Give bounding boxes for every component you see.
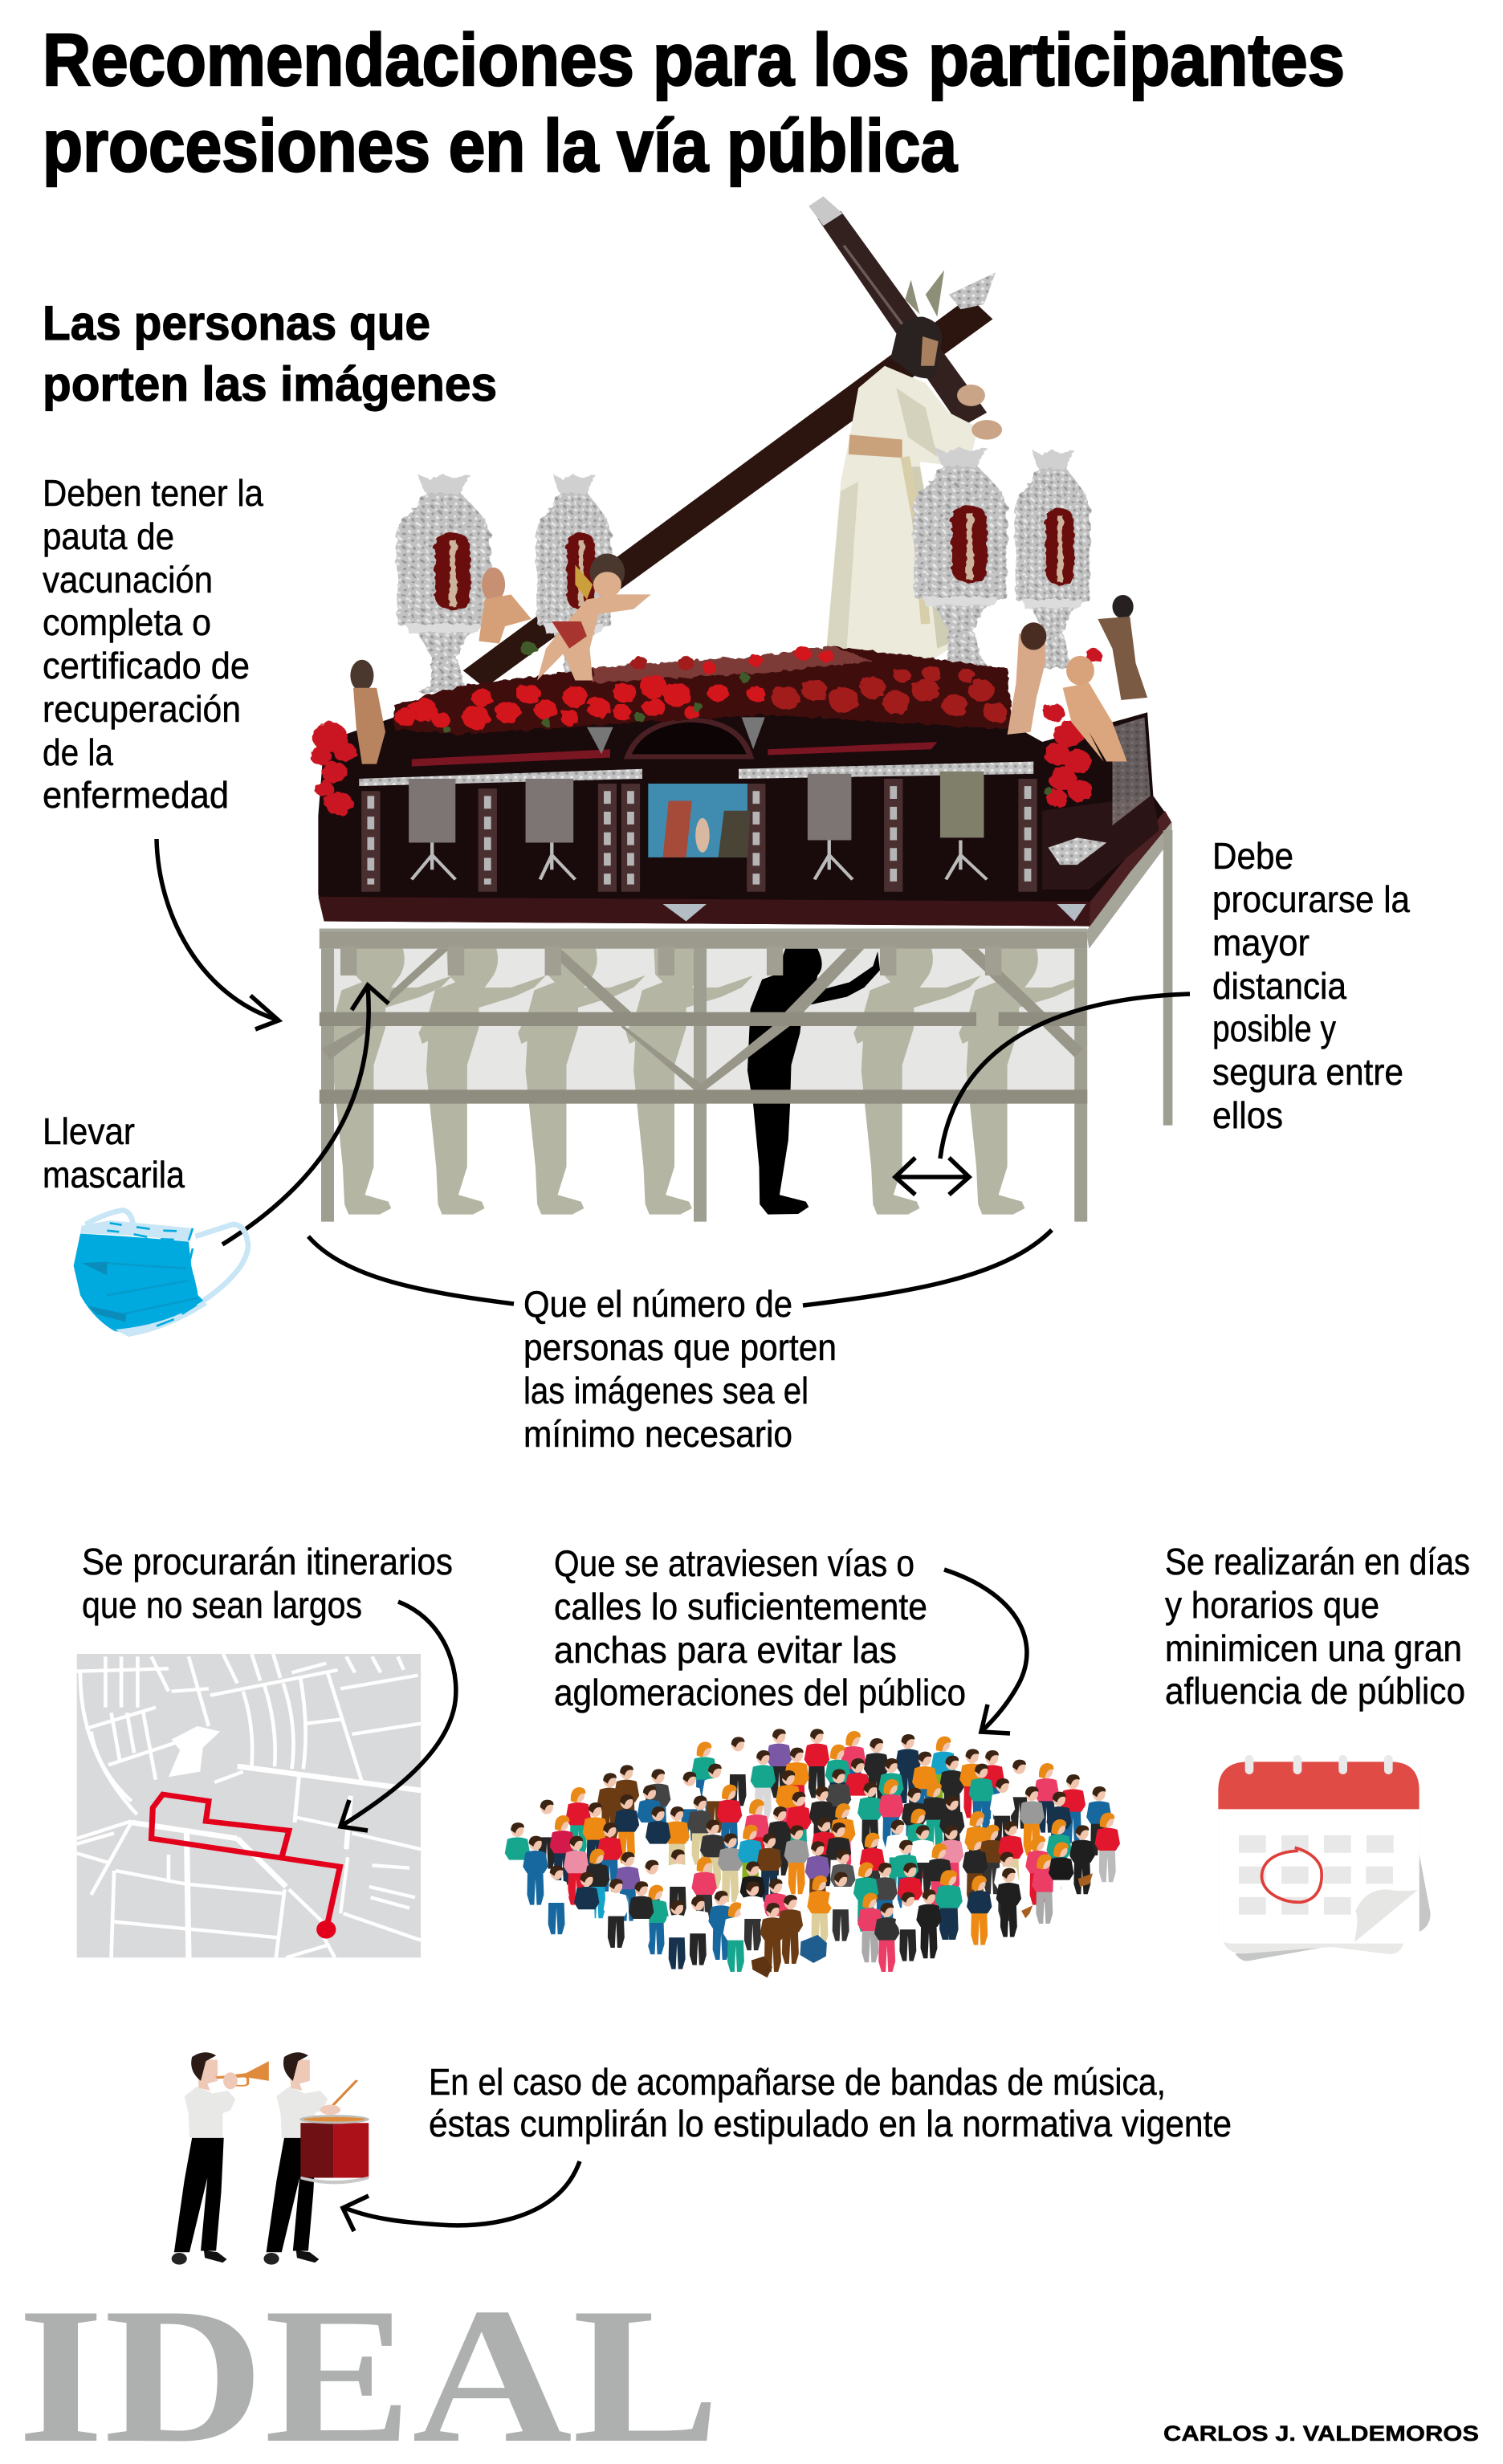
flowers <box>311 641 1102 815</box>
title <box>43 19 1345 187</box>
icon: calendar <box>1218 1755 1431 1961</box>
text: face mask: mascarila <box>43 1154 185 1195</box>
byline: CARLOS J. VALDEMOROS <box>1163 2421 1479 2446</box>
text: number of bearers: las imágenes sea el <box>523 1370 809 1411</box>
frame beams <box>320 821 1172 1222</box>
text: distance: ellos <box>1212 1094 1283 1136</box>
text: vaccination: Deben tener la <box>43 472 263 514</box>
arrow: streets text to crowd <box>944 1570 1027 1733</box>
highlighted bearer <box>747 949 880 1215</box>
icon: face mask <box>74 1210 248 1337</box>
arrow: distance text to gap <box>940 994 1190 1159</box>
arrow: bands text to musicians <box>343 2161 580 2231</box>
text: number of bearers: mínimo necesario <box>523 1413 792 1455</box>
text: number of bearers: personas que porten <box>523 1326 837 1368</box>
text: vaccination: de la <box>43 731 113 773</box>
text: short routes <box>82 1541 453 1626</box>
back panel <box>333 949 1074 1090</box>
text: schedule: afluencia de público <box>1165 1670 1465 1712</box>
cherubs <box>350 554 1147 764</box>
text: vaccination: enfermedad <box>43 774 229 816</box>
text: distance: posible y <box>1212 1008 1336 1049</box>
text: schedule: y horarios que <box>1165 1584 1379 1626</box>
text: vaccination: vacunación <box>43 559 213 601</box>
title: procesiones en la vía pública <box>43 105 958 187</box>
illustration: crowd <box>505 1729 1120 1977</box>
arrow: mask to head <box>222 985 389 1244</box>
icon: drummer <box>263 2052 369 2265</box>
text: wide streets: anchas para evitar las <box>554 1629 897 1671</box>
text: bands: éstas cumplirán lo estipulado en la normativa vigente <box>429 2103 1232 2144</box>
text: schedule <box>1165 1541 1470 1712</box>
central painting <box>648 784 751 857</box>
text: bands <box>429 2061 1232 2144</box>
subheading: Las personas que <box>43 296 430 350</box>
Christ figure <box>826 316 1002 661</box>
text: bands: En el caso de acompañarse de bandas de música, <box>429 2061 1166 2103</box>
double arrow: spacing <box>895 1158 969 1195</box>
text: wide streets: Que se atraviesen vías o <box>554 1542 914 1584</box>
text: distance: Debe <box>1212 835 1293 877</box>
text: number of bearers: Que el número de <box>523 1283 792 1325</box>
cross <box>463 196 996 688</box>
text: vaccination: completa o <box>43 601 211 643</box>
text: wide streets: aglomeraciones del público <box>554 1672 966 1713</box>
text: vaccination: pauta de <box>43 515 174 557</box>
icon: trumpeter <box>172 2052 269 2265</box>
subheading <box>43 296 497 411</box>
text: face mask <box>43 1110 185 1195</box>
illustration: band musicians <box>172 2052 369 2265</box>
bearer silhouettes <box>325 949 1086 1215</box>
title: Recomendaciones para los participantes <box>43 19 1345 101</box>
bracket arc under bearers <box>308 1230 1052 1305</box>
map with route <box>77 1654 421 1957</box>
text: wide streets <box>554 1542 966 1713</box>
text: short routes: que no sean largos <box>82 1584 362 1626</box>
float body <box>318 707 1172 927</box>
text: distance: mayor <box>1212 922 1310 963</box>
text: distance: procurarse la <box>1212 878 1410 920</box>
text: distance <box>1212 835 1410 1136</box>
text: vaccination: recuperación <box>43 688 241 730</box>
text: wide streets: calles lo suficientemente <box>554 1586 927 1627</box>
text: face mask: Llevar <box>43 1110 135 1152</box>
text: schedule: minimicen una gran <box>1165 1627 1462 1669</box>
text: vaccination <box>43 472 263 816</box>
text: vaccination: certificado de <box>43 645 250 686</box>
text: distance: segura entre <box>1212 1051 1403 1093</box>
text: short routes: Se procurarán itinerarios <box>82 1541 453 1582</box>
rear lanterns and cherubs <box>396 474 613 693</box>
text: number of bearers <box>523 1283 837 1455</box>
subheading: porten las imágenes <box>43 357 497 411</box>
front lanterns <box>913 447 1091 668</box>
illustration: bearers frame with silhouettes <box>320 821 1172 1222</box>
illustration: carried float <box>311 196 1172 927</box>
arrow: vaccination text to frame <box>157 839 279 1029</box>
text: distance: distancia <box>1212 965 1346 1007</box>
arrow: routes text to map <box>340 1602 456 1831</box>
route <box>152 1794 340 1939</box>
